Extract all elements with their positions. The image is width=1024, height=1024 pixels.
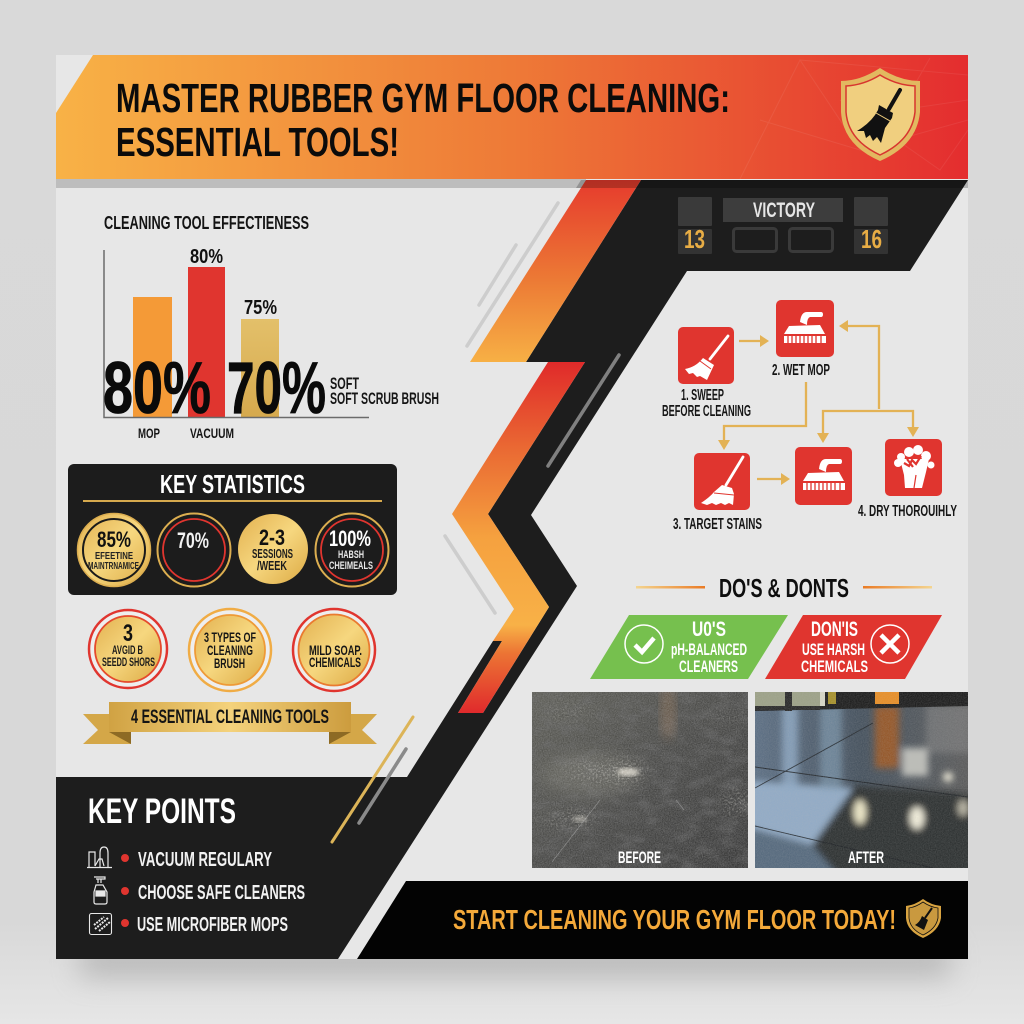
stat: 100%: 100% (329, 526, 371, 551)
panel: don'ts: CHEMICALS (801, 658, 868, 676)
badge: 3 avoid: 3 (123, 620, 133, 647)
panel: do's: pH-BALANCED (671, 641, 747, 659)
scoreboard: VICTORY (753, 199, 815, 222)
key point texts (137, 849, 305, 936)
stat: 100%: CHEIMEALS (329, 560, 373, 572)
badge: 3 types of cleaning brush: 3 TYPES OF (204, 629, 256, 645)
photo: before: BEFORE (618, 848, 661, 867)
step 3: target stains: 3. TARGET STAINS (673, 516, 762, 533)
photo: after (755, 692, 968, 868)
stat: 70%: 70% (177, 528, 209, 553)
stat: 70% (158, 514, 230, 586)
step 2: wet mop (772, 300, 834, 379)
step 1: sweep: BEFORE CLEANING (662, 403, 751, 420)
panel: key statistics (68, 464, 397, 595)
arrows (718, 320, 919, 485)
heading: KEY STATISTICS (160, 469, 305, 499)
panel: don'ts: DON'IS (811, 618, 858, 641)
badge: 3 avoid: AVGID B (112, 643, 143, 657)
panel: don'ts: USE HARSH (802, 641, 865, 659)
poster drop shadow (80, 945, 950, 977)
header banner (56, 55, 968, 179)
badge: mild soap: CHEMICALS (309, 654, 361, 670)
ribbon: 4 essential cleaning tools (83, 702, 377, 744)
title: MASTER RUBBER GYM FLOOR CLEANING: (116, 75, 730, 121)
icon: shield with broom (841, 68, 920, 161)
axis and side labels: VACUUM (190, 425, 234, 441)
big percentages: 70% (227, 348, 326, 429)
scoreboard: 13 (684, 224, 705, 254)
central lightning graphic (56, 180, 980, 959)
stat: 100%: HABSH (338, 549, 364, 561)
stat: 2-3 sessions: 2-3 (259, 525, 285, 550)
icon: vacuum (87, 847, 112, 868)
heading: KEY POINTS (88, 792, 236, 831)
badge: mild soap: MILD SOAP. (309, 642, 362, 658)
key point texts: VACUUM REGULARY (138, 849, 272, 871)
stat: 2-3 sessions: SESSIONS (252, 546, 293, 561)
title (116, 75, 730, 165)
stat: 100% (316, 514, 388, 586)
chart: cleaning tool effectiveness (103, 213, 439, 441)
ribbon: 4 essential cleaning tools: 4 ESSENTIAL CLEANING TOOLS (131, 706, 329, 728)
heading: do's and don'ts: DO'S & DONTS (719, 573, 849, 603)
header shadow band (56, 179, 586, 188)
value labels (190, 246, 277, 319)
step: brush (795, 447, 852, 505)
stat: 2-3 sessions: /WEEK (257, 558, 287, 573)
badge: 3 types of cleaning brush (189, 609, 271, 691)
value labels: 80% (190, 246, 223, 268)
badge: 3 avoid: SEEDD SHORS (102, 655, 155, 669)
stat: 2-3 sessions (238, 514, 308, 584)
icon: cross (871, 625, 909, 663)
axis and side labels: SOFT (330, 374, 359, 393)
photo: after: AFTER (848, 848, 884, 867)
icon: microfiber mop pad (90, 914, 112, 934)
step 3: target stains (673, 453, 762, 533)
axis and side labels: MOP (138, 425, 160, 441)
scoreboard: 16 (861, 224, 882, 254)
step 4: dry thoroughly (858, 439, 957, 520)
flow chart: cleaning steps (662, 300, 957, 533)
panel: do's: U0'S (692, 618, 726, 641)
photo: before (532, 684, 748, 868)
step 4: dry thoroughly: 4. DRY THOROUIHLY (858, 503, 957, 520)
panel: don'ts (765, 615, 942, 679)
icon: spray bottle (94, 877, 107, 904)
value labels: 75% (244, 297, 277, 319)
stat: 85%: MAINTRNAMICE (88, 560, 139, 572)
badge: 3 types of cleaning brush: CLEANING (207, 642, 253, 658)
icon: check (625, 625, 663, 663)
step 2: wet mop: 2. WET MOP (772, 362, 830, 379)
call to action banner (357, 881, 968, 959)
panel: key points (87, 792, 305, 936)
axis and side labels: SOFT SCRUB BRUSH (330, 389, 439, 408)
stat: 85%: EFEETINE (95, 550, 133, 562)
step 1: sweep (662, 327, 751, 420)
key point texts: CHOOSE SAFE CLEANERS (138, 882, 305, 904)
stat: 85%: 85% (97, 527, 131, 552)
title: ESSENTIAL TOOLS! (116, 119, 399, 165)
badges row (89, 609, 375, 691)
bullet dots (121, 854, 129, 927)
big percentages (103, 348, 326, 429)
chart title: CLEANING TOOL EFFECTIENESS (104, 213, 309, 233)
panel: do's (590, 615, 788, 679)
badge: 3 avoid (89, 610, 167, 688)
panel: do's: CLEANERS (679, 658, 738, 676)
step 1: sweep: 1. SWEEP (681, 387, 724, 404)
key point texts: USE MICROFIBER MOPS (137, 914, 288, 936)
icon: small shield (906, 899, 941, 938)
badge: 3 types of cleaning brush: BRUSH (214, 655, 245, 671)
scoreboard (678, 197, 888, 254)
big percentages: 80% (103, 348, 211, 429)
decorative streaks (332, 203, 619, 842)
stat: 85% (78, 514, 150, 586)
badge: mild soap (293, 609, 375, 691)
axis and side labels (138, 374, 439, 441)
bars (133, 267, 279, 417)
